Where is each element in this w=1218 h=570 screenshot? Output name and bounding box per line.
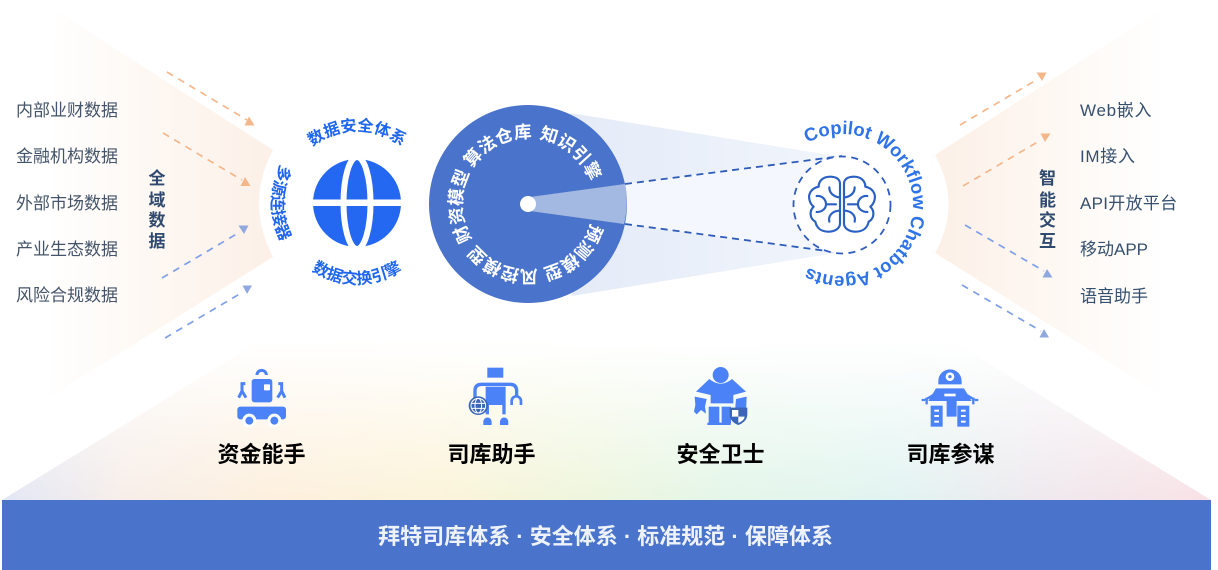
label: 多源连接器: 多源连接器 bbox=[270, 165, 292, 240]
left data source list: 金融机构数据 bbox=[16, 147, 118, 166]
right interaction list: 移动APP bbox=[1080, 240, 1148, 259]
left data source list: 产业生态数据 bbox=[16, 240, 118, 259]
left data source list: 风险合规数据 bbox=[16, 286, 118, 305]
heading: 智能交互: 智 bbox=[1039, 168, 1056, 188]
heading: 智能交互: 能 bbox=[1039, 191, 1056, 210]
heading: 智能交互: 交 bbox=[1039, 210, 1056, 230]
right interaction list: Web嵌入 bbox=[1080, 101, 1152, 120]
arrows: right outbound bbox=[960, 72, 1052, 338]
arrows: left inbound bbox=[162, 72, 254, 338]
light cone to brain bbox=[570, 113, 842, 296]
right interaction list bbox=[1080, 101, 1178, 306]
icon: globe bbox=[312, 157, 402, 249]
left data source list: 内部业财数据 bbox=[16, 101, 118, 120]
title: 资金能手: 资金能手 bbox=[217, 442, 306, 467]
title: 安全卫士: 安全卫士 bbox=[676, 442, 765, 467]
label: Copilot Workflow Chatbot Agents: Copilot Workflow Chatbot Agents bbox=[804, 120, 924, 286]
panel: model wheel: 财资模型 bbox=[446, 168, 472, 244]
panel: model wheel: 预测模型 bbox=[543, 224, 604, 282]
heading: 智能交互: 互 bbox=[1039, 232, 1056, 251]
icon: guard robot with shield bbox=[694, 367, 747, 425]
heading: 全域数据: 数 bbox=[148, 211, 166, 230]
title: 司库助手: 司库助手 bbox=[447, 442, 536, 467]
right interaction list: 语音助手 bbox=[1080, 287, 1148, 306]
right interaction list: IM接入 bbox=[1080, 147, 1136, 166]
panel: model wheel: 算法仓库 bbox=[462, 123, 532, 168]
panel: model wheel: 风控模型 bbox=[466, 244, 538, 284]
panel: foundation bar bbox=[2, 500, 1211, 570]
heading: 全域数据: 据 bbox=[148, 232, 166, 251]
foundation bar text: 拜特司库体系 · 安全体系 · 标准规范 · 保障体系 bbox=[378, 524, 833, 549]
right interaction list: API开放平台 bbox=[1080, 194, 1178, 213]
heading: 全域数据: 全 bbox=[148, 168, 166, 188]
icon: robot with globe bbox=[469, 368, 521, 425]
heading: 智能交互 bbox=[1039, 168, 1056, 251]
title: 司库参谋: 司库参谋 bbox=[906, 442, 995, 467]
heading: 全域数据 bbox=[148, 168, 166, 251]
panel: model wheel: 知识引擎 bbox=[540, 124, 602, 180]
left data source list: 外部市场数据 bbox=[16, 194, 118, 213]
label: 数据安全体系: 数据安全体系 bbox=[306, 118, 406, 147]
label: 数据交换引擎: 数据交换引擎 bbox=[312, 260, 402, 286]
heading: 全域数据: 域 bbox=[148, 191, 166, 210]
panel: model wheel bbox=[429, 105, 627, 303]
icon: robot on wheels bbox=[237, 370, 286, 428]
left data source list bbox=[16, 101, 118, 305]
panel: rainbow foundation glow bbox=[2, 340, 1211, 500]
dashed beams bbox=[625, 156, 842, 253]
panel: left data source fan bbox=[50, 10, 273, 397]
icon: advisor robot bbox=[922, 369, 978, 427]
panel: right interaction fan bbox=[935, 10, 1165, 397]
icon: brain in dashed circle bbox=[794, 156, 890, 254]
